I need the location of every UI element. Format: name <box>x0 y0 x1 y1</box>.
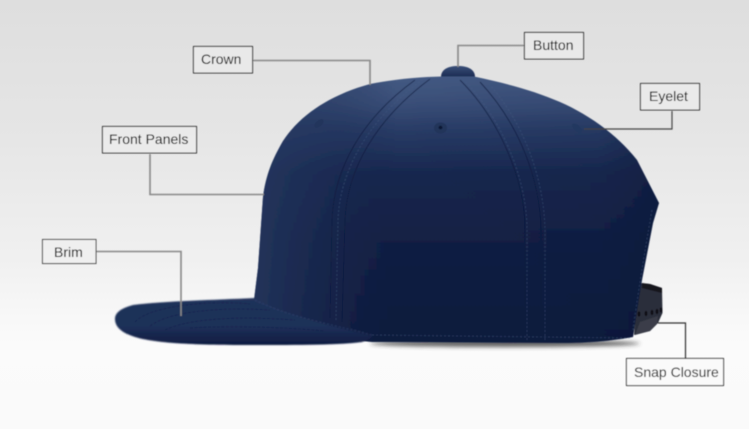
seam between crown and brim <box>255 300 372 335</box>
brim stitching <box>135 303 325 331</box>
brim <box>115 298 372 345</box>
label: Brim: Brim <box>54 244 83 260</box>
snap closure strap <box>634 283 662 335</box>
label: Front Panels: Front Panels <box>109 131 188 147</box>
label: Snap Closure: Snap Closure <box>634 364 719 380</box>
connector: crown <box>253 60 370 85</box>
connector: brim <box>96 252 181 316</box>
label: Snap Closure <box>626 358 724 386</box>
label: Crown <box>194 46 252 73</box>
connector: snap closure <box>658 323 686 358</box>
crown seams <box>330 79 541 340</box>
shadow under hat <box>370 340 640 347</box>
connector: eyelet <box>584 111 672 129</box>
label: Crown: Crown <box>201 51 241 67</box>
label: Eyelet <box>640 84 700 110</box>
label: Eyelet: Eyelet <box>649 88 688 104</box>
connector: front panels <box>150 154 264 194</box>
crown <box>250 76 659 343</box>
label: Button <box>524 32 584 59</box>
label: Brim <box>42 240 96 264</box>
hat illustration <box>42 32 724 386</box>
label: Button: Button <box>533 37 573 53</box>
label: Front Panels <box>102 126 196 153</box>
eyelets <box>434 122 447 134</box>
connector: button <box>458 46 524 67</box>
button <box>441 66 475 77</box>
